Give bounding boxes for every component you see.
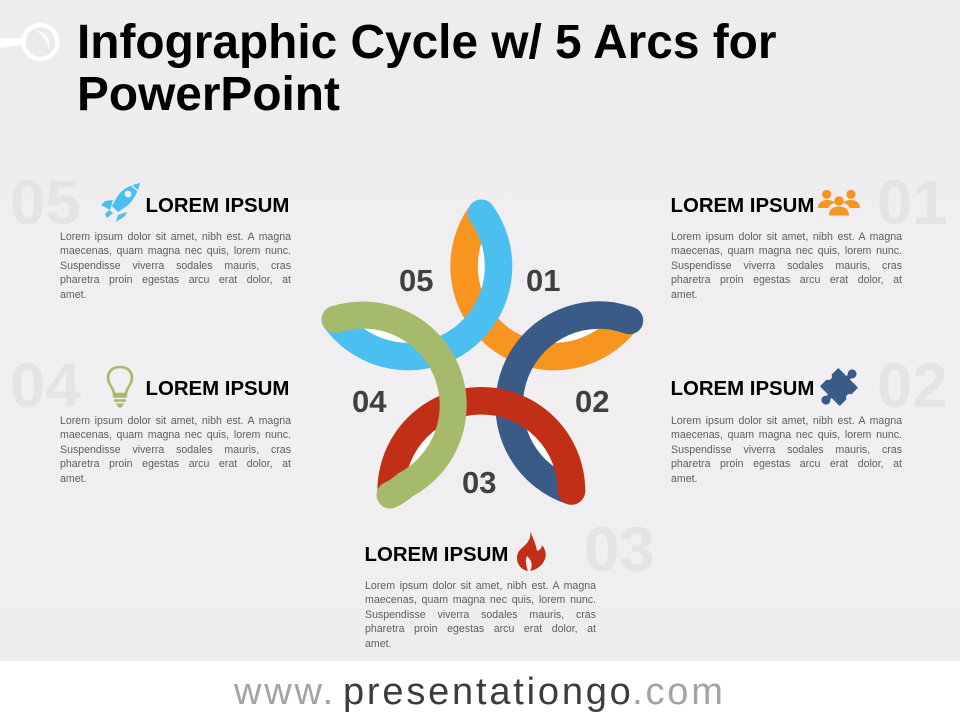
body text: Suspendisse viverra sodales mauris, cras	[60, 444, 291, 456]
body text: maecenas, quam magna nec quis, lorem nunc.	[365, 594, 596, 606]
body text: pharetra proin egestas arcu erat dolor, at	[671, 274, 902, 286]
body text	[60, 231, 291, 301]
big number 05: 05	[10, 168, 81, 238]
body text: Lorem ipsum dolor sit amet, nibh est. A magna	[365, 580, 596, 592]
heading: LOREM IPSUM	[364, 544, 508, 566]
cycle number 05: 05	[399, 263, 433, 298]
icon: people	[818, 190, 860, 216]
body text: maecenas, quam magna nec quis, lorem nunc.	[671, 429, 902, 441]
arc 03 red	[391, 401, 572, 491]
body text: amet.	[671, 289, 698, 301]
arc 04 green	[335, 315, 453, 495]
cycle number 01: 01	[526, 263, 560, 298]
body text: Lorem ipsum dolor sit amet, nibh est. A magna	[60, 415, 291, 427]
title: PowerPoint	[77, 68, 340, 120]
body text	[671, 231, 902, 301]
body text: Lorem ipsum dolor sit amet, nibh est. A magna	[671, 415, 902, 427]
body text: Lorem ipsum dolor sit amet, nibh est. A magna	[60, 231, 291, 243]
panel: 01 people	[670, 168, 948, 301]
panel: 02 puzzle	[670, 351, 948, 485]
body text: pharetra proin egestas arcu erat dolor, at	[365, 623, 596, 635]
cycle number 03: 03	[462, 465, 496, 500]
heading: LOREM IPSUM	[146, 378, 289, 400]
body text	[60, 415, 291, 485]
body text: Suspendisse viverra sodales mauris, cras	[60, 260, 291, 272]
body text: pharetra proin egestas arcu erat dolor, at	[60, 458, 291, 470]
panel: 04 lightbulb	[10, 351, 291, 485]
big number 03: 03	[584, 515, 655, 585]
body text: maecenas, quam magna nec quis, lorem nunc.	[60, 429, 291, 441]
body text: Suspendisse viverra sodales mauris, cras	[671, 260, 902, 272]
body text: pharetra proin egestas arcu erat dolor, at	[60, 274, 291, 286]
body text: amet.	[365, 638, 392, 650]
footer	[0, 661, 960, 720]
cycle number 02: 02	[575, 384, 609, 419]
icon: puzzle piece	[820, 368, 858, 406]
body text: amet.	[60, 473, 86, 485]
icon: flame	[517, 531, 546, 571]
body text: Suspendisse viverra sodales mauris, cras	[671, 444, 902, 456]
heading: LOREM IPSUM	[670, 195, 814, 217]
body text: pharetra proin egestas arcu erat dolor, at	[671, 458, 902, 470]
body text: amet.	[671, 473, 698, 485]
big number 01: 01	[877, 168, 948, 238]
body text	[365, 580, 596, 650]
body text	[671, 415, 902, 485]
icon: lightbulb	[106, 366, 134, 408]
arc 05 blue	[335, 213, 499, 357]
panel: 03 flame	[364, 515, 655, 650]
body text: maecenas, quam magna nec quis, lorem nunc.	[671, 245, 902, 257]
footer url: www.presentationgo.com	[234, 671, 726, 713]
cycle number 04: 04	[352, 384, 386, 419]
body text: Suspendisse viverra sodales mauris, cras	[365, 609, 596, 621]
body text: maecenas, quam magna nec quis, lorem nunc.	[60, 245, 291, 257]
panel: 05 rocket	[10, 168, 291, 301]
icon: rocket	[101, 183, 140, 222]
title: Infographic Cycle w/ 5 Arcs for	[77, 16, 776, 68]
heading: LOREM IPSUM	[670, 378, 814, 400]
body text: amet.	[60, 289, 86, 301]
arc 01 orange	[464, 213, 627, 357]
big number 02: 02	[877, 351, 948, 421]
icon: corner ring pin	[0, 22, 60, 62]
title	[77, 16, 776, 120]
big number 04: 04	[10, 351, 81, 421]
body text: Lorem ipsum dolor sit amet, nibh est. A magna	[671, 231, 902, 243]
white petal gaps	[330, 213, 633, 501]
heading: LOREM IPSUM	[146, 195, 289, 217]
arc 02 navy	[509, 315, 630, 491]
